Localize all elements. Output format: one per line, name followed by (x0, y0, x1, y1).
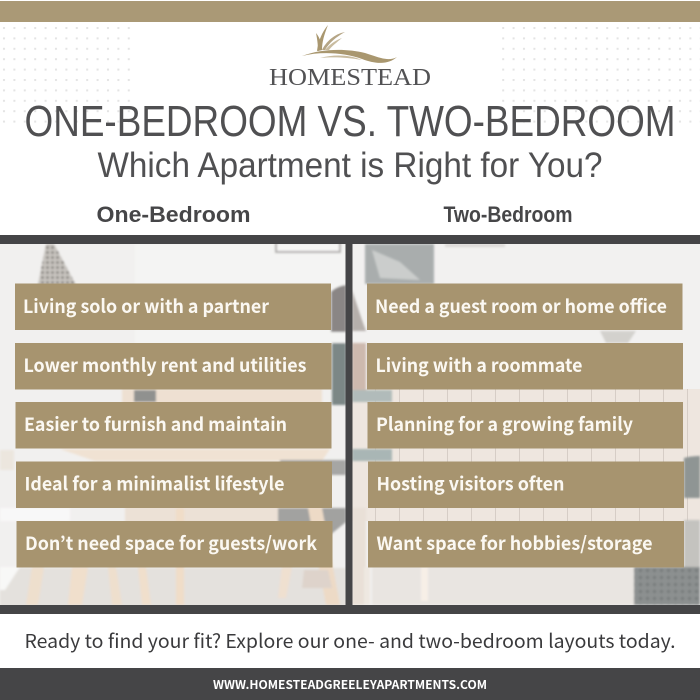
item: no guest space (16, 521, 332, 568)
panel: one-bedroom list (15, 284, 332, 568)
column heading: Two-Bedroom: Two-Bedroom (444, 202, 572, 227)
item: hobbies storage (368, 521, 684, 568)
item: living solo: Living solo or with a partner (23, 293, 270, 319)
item: easier to furnish (16, 402, 332, 448)
item: guest room (367, 284, 682, 330)
logo: Homestead (269, 25, 431, 91)
item: hosting visitors: Hosting visitors often (376, 470, 564, 496)
top dark divider (0, 235, 700, 244)
item: roommate: Living with a roommate (376, 352, 582, 378)
footer website: WWW.HOMESTEADGREELEYAPARTMENTS.COM (213, 676, 487, 693)
dot pattern left (0, 24, 137, 124)
call to action text: Ready to find your fit? Explore our one- and two-bedroom layouts today. (24, 627, 676, 654)
panel: two-bedroom list (367, 284, 684, 568)
column heading: One-Bedroom: One-Bedroom (96, 202, 250, 227)
dot pattern right (500, 24, 700, 124)
item: lower rent: Lower monthly rent and utilities (24, 352, 306, 378)
item: growing family: Planning for a growing family (376, 411, 633, 437)
item: roommate (367, 343, 683, 390)
item: minimalist lifestyle (16, 462, 332, 508)
bottom dark divider (0, 605, 700, 614)
panel: one-bedroom photo background (0, 242, 346, 608)
item: living solo (15, 284, 331, 330)
center dark divider (346, 244, 352, 605)
footer bar (0, 668, 700, 700)
logo wordmark: HOMESTEAD (269, 65, 431, 91)
item: guest room: Need a guest room or home office (375, 293, 667, 319)
subtitle: Which Apartment is Right for You? (98, 146, 602, 185)
top gold band (0, 1, 700, 22)
panel: two-bedroom photo background (352, 244, 700, 605)
item: lower rent (15, 343, 332, 390)
item: hosting visitors (368, 462, 684, 508)
item: easier to furnish: Easier to furnish and maintain (24, 411, 287, 437)
item: minimalist lifestyle: Ideal for a minimalist lifestyle (24, 470, 284, 496)
item: growing family (368, 402, 683, 448)
item: no guest space: Don’t need space for guests/work (25, 530, 318, 556)
icon: grass and hills (302, 25, 397, 63)
item: hobbies storage: Want space for hobbies/storage (376, 530, 652, 556)
